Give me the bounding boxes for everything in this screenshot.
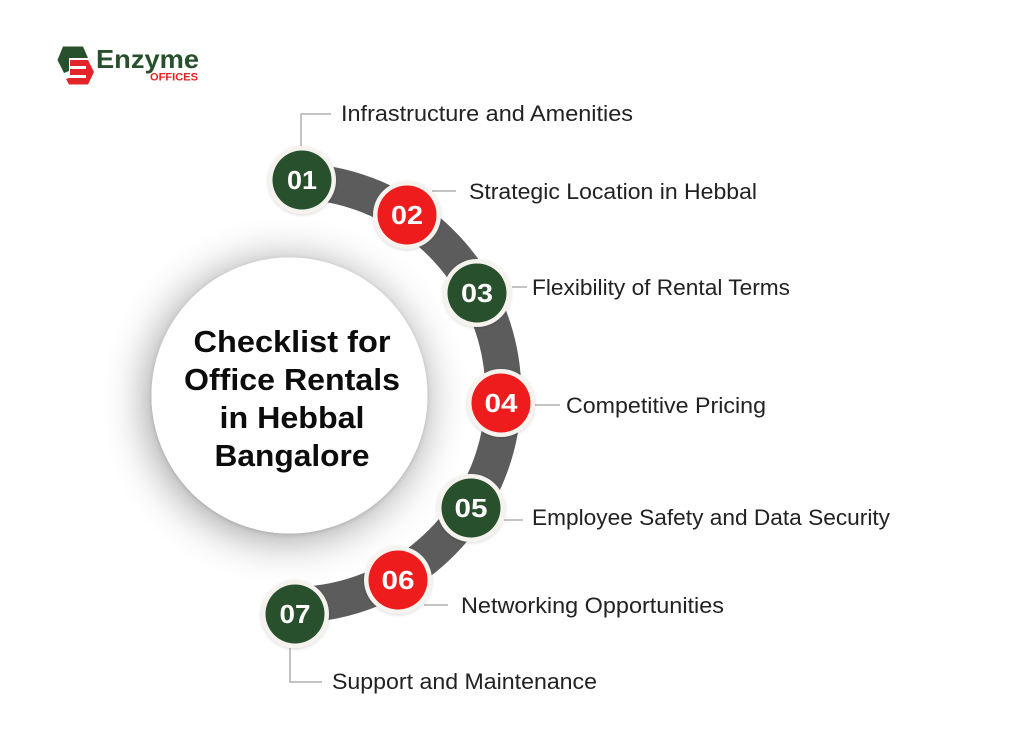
- logo wordmark: Enzyme: [96, 44, 199, 74]
- label 05: Employee Safety and Data Security: [532, 505, 890, 530]
- circle disc: [152, 258, 428, 534]
- item 05: [437, 474, 890, 542]
- badge 01: 01: [287, 165, 317, 195]
- logo subtext: OFFICES: [150, 72, 198, 84]
- label 02: Strategic Location in Hebbal: [469, 179, 757, 204]
- badge 05: 05: [454, 493, 488, 523]
- logo: Enzyme Offices: [58, 44, 199, 84]
- badge 07: [261, 580, 329, 648]
- item 06: [364, 546, 724, 618]
- title: Bangalore: [214, 438, 370, 473]
- label 01: Infrastructure and Amenities: [341, 101, 633, 126]
- badge 01: [268, 146, 336, 214]
- badge 05: [437, 474, 505, 542]
- item 03: [443, 259, 790, 327]
- item 02: [373, 179, 757, 249]
- item 07: [261, 580, 597, 694]
- item 04: [467, 369, 766, 437]
- label 06: Networking Opportunities: [461, 593, 724, 618]
- arc band: [295, 181, 503, 605]
- label 07: Support and Maintenance: [332, 669, 597, 694]
- title: Checklist for: [194, 324, 390, 359]
- badge 04: 04: [484, 388, 518, 418]
- item 01: [268, 101, 633, 214]
- badge 04: [467, 369, 535, 437]
- badge 02: 02: [391, 200, 423, 230]
- title: Office Rentals: [184, 362, 400, 397]
- badge 07: 07: [280, 599, 310, 629]
- badge 03: 03: [461, 278, 493, 308]
- central circle: title: [152, 258, 428, 534]
- title: [184, 324, 400, 473]
- badge 02: [373, 181, 441, 249]
- label 03: Flexibility of Rental Terms: [532, 275, 790, 300]
- icon: logo hexagon: [58, 46, 94, 84]
- title: in Hebbal: [220, 400, 364, 435]
- badge 03: [443, 259, 511, 327]
- label 04: Competitive Pricing: [566, 393, 766, 418]
- badge 06: [364, 546, 432, 614]
- badge 06: 06: [382, 565, 414, 595]
